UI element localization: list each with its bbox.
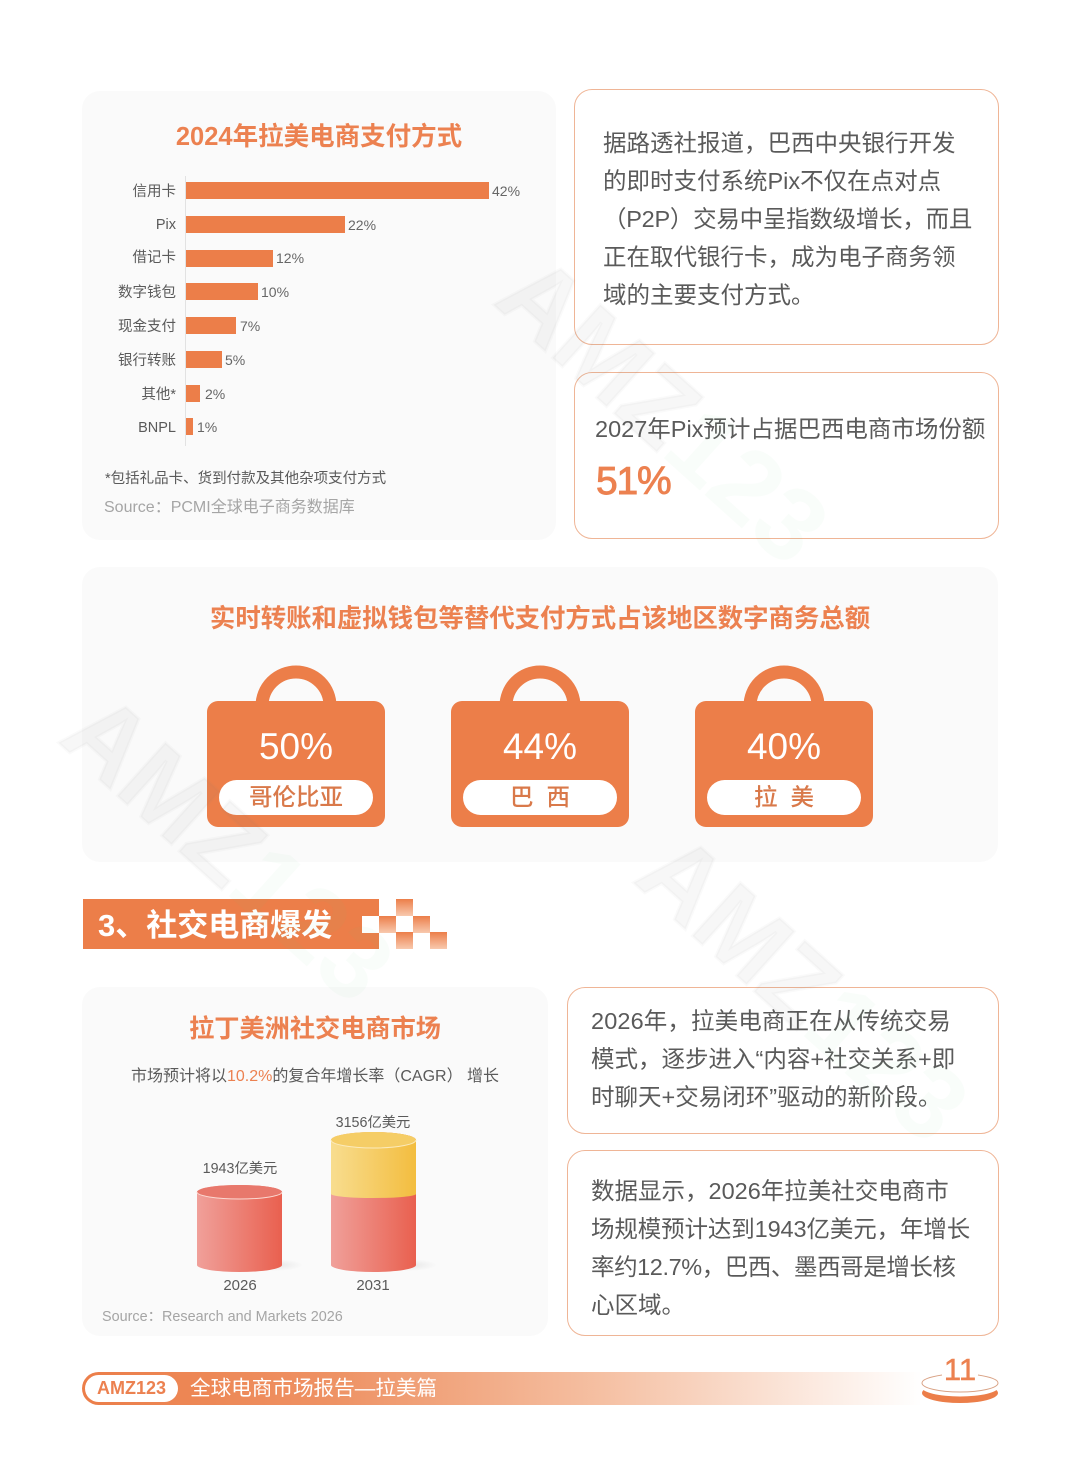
text card: market data: 率约12.7%，巴西、墨西哥是增长核 [591, 1254, 956, 1280]
watermark: left: AMZ123 [41, 672, 415, 1025]
text card: new stage: 2026年，拉美电商正在从传统交易 [591, 1008, 951, 1034]
bar row: Pix: Pix [156, 217, 176, 233]
stat card: Pix 2027 share [574, 372, 999, 539]
cylinder 2031 [331, 1132, 437, 1272]
text card: Pix growth: 的即时支付系统Pix不仅在点对点 [603, 168, 941, 194]
year label 2026: 2026 [223, 1277, 257, 1294]
year label 2031: 2031 [356, 1277, 390, 1294]
heading: 2024 payment methods: 2024年拉美电商支付方式 [176, 123, 462, 151]
text card: market data: 心区域。 [591, 1292, 685, 1318]
stat value: 51% [596, 460, 670, 503]
text card: Pix growth: 域的主要支付方式。 [603, 282, 814, 308]
cylinder 2026 [197, 1185, 303, 1272]
icon: bag Brazil 44%: 巴 西 [510, 784, 570, 810]
text card: new stage: 时聊天+交易闭环”驱动的新阶段。 [591, 1084, 942, 1110]
icon: page number disc [922, 1374, 998, 1403]
text card: market data: 场规模预计达到1943亿美元，年增长 [591, 1216, 970, 1242]
icon: bag Brazil 44%: 44% [503, 726, 577, 767]
footer logo pill [85, 1375, 178, 1402]
icon: bag Latin America 40%: 拉 美 [754, 784, 814, 810]
panel: payment methods chart [82, 91, 556, 540]
bar row: digital wallet: 10% [261, 284, 289, 300]
icon: bag Colombia 50%: 哥伦比亚 [249, 784, 343, 810]
page number: 11 [944, 1352, 976, 1387]
bar row: BNPL: 1% [197, 419, 217, 435]
bar chart: payment method shares [118, 176, 520, 446]
bar row: cash [118, 317, 260, 335]
text card: market data: 数据显示，2026年拉美社交电商市 [591, 1178, 949, 1204]
text card: Pix growth: （P2P）交易中呈指数级增长，而且 [603, 206, 972, 232]
bar row: Pix [156, 216, 376, 233]
bar row: cash: 现金支付 [118, 319, 176, 335]
bar row: debit card: 借记卡 [132, 250, 176, 266]
bar row: credit card: 42% [492, 183, 520, 199]
footnote: *包括礼品卡、货到付款及其他杂项支付方式 [105, 471, 386, 487]
heading: alternative payments: 实时转账和虚拟钱包等替代支付方式占该地区数字商务总额 [210, 605, 870, 633]
bar row: other: 2% [205, 386, 225, 402]
bar row: BNPL [138, 418, 217, 436]
bar row: bank transfer: 5% [225, 352, 245, 368]
icon: checker squares [362, 899, 447, 949]
bar row: bank transfer: 银行转账 [118, 353, 176, 369]
icon: bag Colombia 50% [207, 666, 385, 827]
bar row: other: 其他* [141, 387, 176, 403]
source: Research and Markets: Source：Research and Markets 2026 [102, 1309, 343, 1325]
panel: LatAm social commerce market [82, 987, 548, 1336]
bar row: credit card [132, 182, 520, 200]
source: PCMI: Source：PCMI全球电子商务数据库 [104, 499, 355, 516]
icon: bag Latin America 40%: 40% [747, 726, 821, 767]
footer title: 全球电商市场报告—拉美篇 [190, 1377, 437, 1400]
stat label: 2027年Pix预计占据巴西电商市场份额 [595, 416, 985, 442]
text card: Pix growth [574, 89, 999, 345]
heading text: 3、社交电商爆发 [98, 908, 332, 943]
chart axis [185, 176, 186, 446]
text card: Pix growth: 正在取代银行卡，成为电子商务领 [603, 244, 956, 270]
text card: new stage [567, 987, 999, 1134]
footer bar [82, 1372, 922, 1405]
value label 3156: 3156亿美元 [336, 1115, 410, 1131]
bar row: bank transfer [118, 351, 245, 369]
bar row: credit card: 信用卡 [132, 184, 176, 200]
bar row: Pix: 22% [348, 217, 376, 233]
bar row: debit card [132, 249, 304, 267]
bar row: cash: 7% [240, 318, 260, 334]
text card: Pix growth: 据路透社报道，巴西中央银行开发 [603, 130, 956, 156]
footer logo pill: AMZ123 [97, 1378, 166, 1398]
text card: new stage: 模式，逐步进入“内容+社交关系+即 [591, 1046, 955, 1072]
text card: market data [567, 1150, 999, 1336]
section heading: social commerce [83, 899, 447, 949]
bar row: BNPL: BNPL [138, 420, 176, 436]
heading bar [83, 899, 379, 949]
watermark: lower right: AMZ123 [616, 812, 990, 1165]
panel: alternative payments [82, 567, 998, 862]
icon: bag Brazil 44% [451, 666, 629, 827]
cylinder chart [196, 1132, 425, 1272]
bar row: digital wallet: 数字钱包 [118, 285, 176, 301]
icon: bag Colombia 50%: 50% [259, 726, 333, 767]
bar row: digital wallet [118, 283, 289, 301]
CAGR subtitle: 市场预计将以10.2%的复合年增长率（CAGR） 增长 [131, 1068, 499, 1085]
bar row: other [141, 385, 225, 403]
icon: bag Latin America 40% [695, 666, 873, 827]
heading: social commerce market: 拉丁美洲社交电商市场 [189, 1015, 441, 1043]
bar row: debit card: 12% [276, 250, 304, 266]
value label 1943: 1943亿美元 [203, 1161, 277, 1177]
watermark: upper right: AMZ123 [476, 234, 850, 587]
